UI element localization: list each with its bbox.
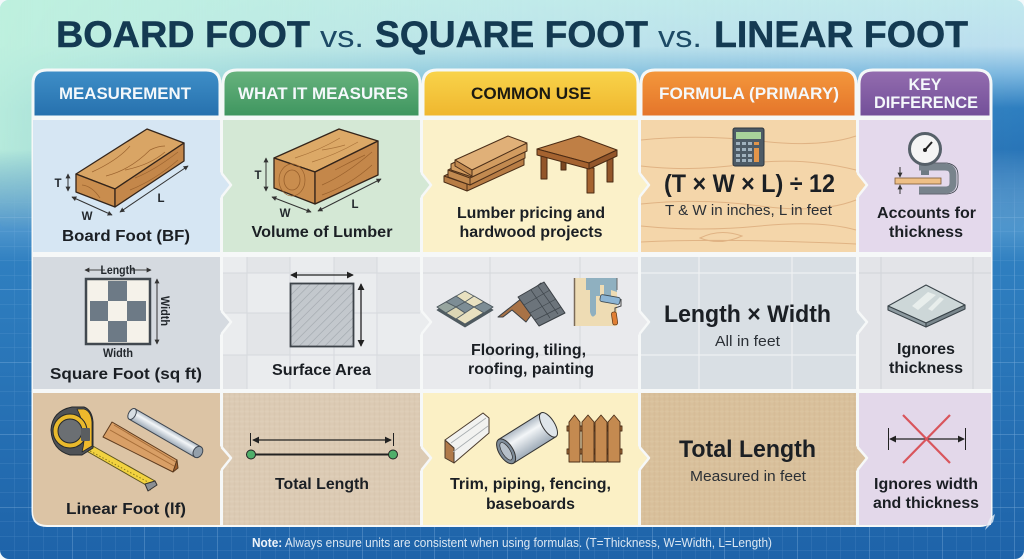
icon: board with dimensions: L — [157, 193, 165, 205]
label: flooring and roofing: Flooring, tiling, — [471, 342, 586, 359]
header: measurement — [33, 70, 220, 117]
cell: ignores width and thickness — [859, 393, 991, 525]
icon: table — [537, 136, 617, 193]
formula: area: Length × Width — [664, 301, 831, 328]
cell: ignores thickness — [859, 257, 991, 389]
label: flooring and roofing: roofing, painting — [468, 361, 594, 378]
icon: checker tile with dimensions: Width — [103, 348, 133, 360]
label: volume of lumber: Volume of Lumber — [252, 224, 392, 241]
icon: lumber block — [254, 129, 381, 220]
label: surface area: Surface Area — [272, 362, 371, 379]
header: what it measures — [223, 70, 420, 117]
cell: total length — [223, 393, 420, 525]
icon: board with dimensions: W — [82, 211, 93, 223]
label: trim and piping: baseboards — [486, 496, 575, 513]
icon: board with dimensions: T — [54, 178, 62, 190]
cell: lumber pricing — [423, 120, 638, 252]
label: trim and piping: Trim, piping, fencing, — [450, 476, 611, 493]
title: LINEAR FOOT — [714, 14, 968, 55]
header: key difference — [859, 70, 991, 117]
label: ignores width and thickness — [873, 476, 979, 512]
title — [56, 14, 968, 55]
icon: checker tile with dimensions: Length — [100, 265, 136, 277]
title: vs. — [320, 19, 364, 54]
icon: checker tile with dimensions: Width — [158, 296, 170, 326]
label: ignores thickness: thickness — [889, 360, 963, 377]
label: accounts for thickness: Accounts for — [877, 205, 976, 222]
icon: board with dimensions — [54, 129, 188, 223]
label: square foot: Square Foot (sq ft) — [50, 366, 202, 383]
label: trim and piping — [450, 476, 611, 513]
icon: lumber block: W — [280, 208, 291, 220]
icon: lumber stack — [444, 136, 527, 191]
icon: calculator — [733, 128, 764, 166]
header: what it measures: WHAT IT MEASURES — [238, 84, 408, 103]
icon: lumber block: L — [351, 199, 359, 211]
formula: total length: Total Length — [679, 436, 816, 463]
icon: tape measure, trim and pipe — [51, 407, 205, 491]
header: common use — [423, 70, 638, 117]
header: common use: COMMON USE — [471, 84, 591, 103]
cell: linear foot — [33, 393, 220, 525]
label: ignores width and thickness: and thickness — [873, 495, 979, 512]
icon: paint and roller — [574, 278, 621, 326]
label: lumber pricing: hardwood projects — [460, 224, 603, 241]
label: flooring and roofing — [468, 342, 594, 378]
icon: floor tiles — [437, 291, 493, 327]
icon: crossed-out dimension — [888, 415, 966, 463]
header: formula — [641, 70, 856, 117]
cell: trim and piping — [423, 393, 638, 525]
cell: accounts for thickness — [859, 120, 991, 252]
icon: hatched square — [290, 275, 361, 346]
label: total length: Total Length — [275, 476, 369, 493]
footer note: Note: Always ensure units are consistent when using formulas. (T=Thickness, W=Width, L=Length) — [252, 536, 772, 550]
arrows: row connectors — [220, 172, 867, 471]
note: all in feet: All in feet — [715, 333, 781, 350]
note: units: T & W in inches, L in feet — [665, 202, 833, 219]
icon: lumber block: T — [254, 170, 262, 182]
label: ignores width and thickness: Ignores width — [874, 476, 978, 493]
label: ignores thickness: Ignores — [897, 341, 955, 358]
icon: shingle roof — [498, 282, 565, 326]
header: key difference: KEY — [908, 75, 942, 94]
label: lumber pricing: Lumber pricing and — [457, 205, 605, 222]
title: BOARD FOOT — [56, 14, 310, 55]
title: vs. — [658, 19, 702, 54]
cell: board foot formula — [641, 120, 856, 252]
icon: pipe — [493, 410, 561, 467]
title: SQUARE FOOT — [375, 14, 648, 55]
header: measurement: MEASUREMENT — [59, 84, 192, 103]
sparkle — [985, 514, 995, 530]
cell: linear formula — [641, 393, 856, 525]
icon: thickness gauge — [895, 134, 958, 194]
cell: surface area — [223, 257, 420, 389]
icon: checker tile with dimensions — [85, 265, 170, 360]
header: key difference: DIFFERENCE — [874, 93, 978, 112]
label: lumber pricing — [457, 205, 605, 241]
cell: volume of lumber — [223, 120, 420, 252]
header: formula: FORMULA (PRIMARY) — [659, 84, 839, 103]
cell: square foot — [33, 257, 220, 389]
icon: white trim — [445, 413, 489, 463]
cell: area formula — [641, 257, 856, 389]
note: measured in feet: Measured in feet — [690, 468, 807, 485]
cell: board foot — [33, 120, 220, 252]
icon: length line with endpoints — [246, 433, 398, 459]
icon: thin sheet — [888, 285, 965, 327]
formula: board foot: (T × W × L) ÷ 12 — [664, 170, 835, 198]
label: linear foot: Linear Foot (lf) — [66, 501, 186, 518]
label: accounts for thickness: thickness — [889, 224, 963, 241]
cell: flooring and roofing — [423, 257, 638, 389]
label: ignores thickness — [889, 341, 963, 377]
label: board foot: Board Foot (BF) — [62, 228, 190, 245]
label: accounts for thickness — [877, 205, 976, 241]
icon: wooden fence — [567, 415, 622, 462]
table panel — [32, 70, 992, 527]
